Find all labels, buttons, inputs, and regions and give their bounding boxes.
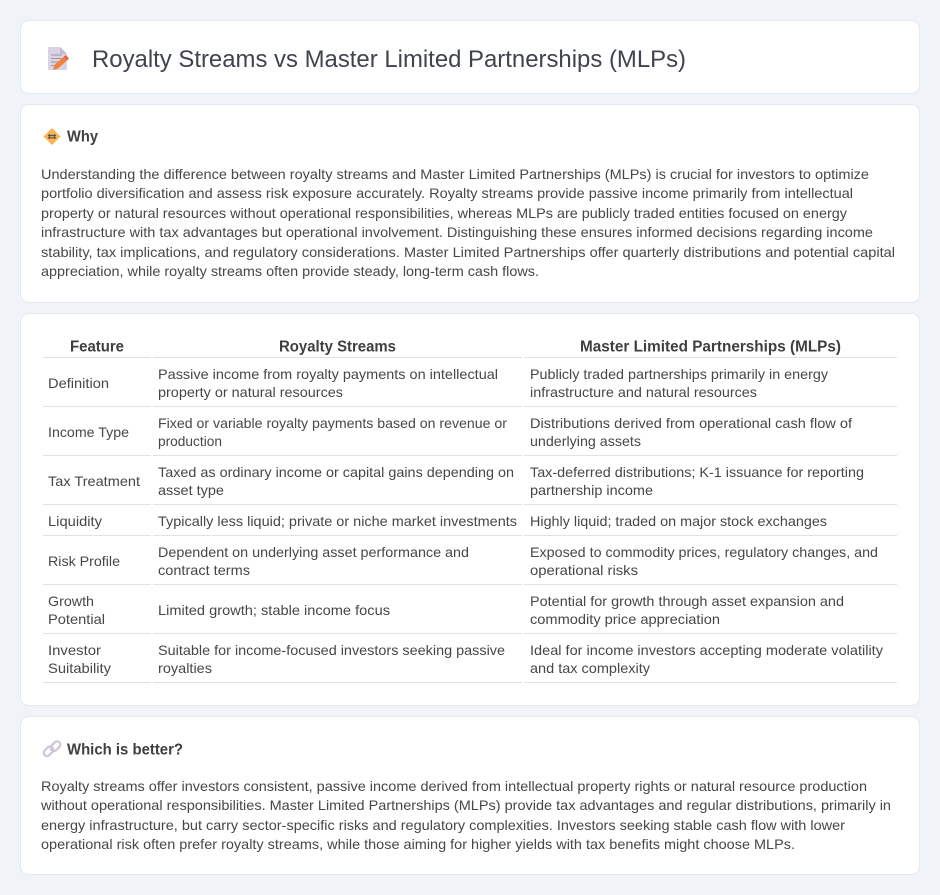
- row: risk profile: operational risks: [530, 562, 638, 578]
- why text block: property or natural resources without operational responsibilities, whereas MLPs are publicly traded entities focused on energy: [41, 205, 847, 221]
- row: risk profile: [48, 544, 878, 578]
- row: liquidity: Typically less liquid; private or niche market investments: [158, 513, 517, 529]
- table header: Master Limited Partnerships (MLPs): [580, 338, 841, 356]
- title: Royalty Streams vs Master Limited Partnerships (MLPs): [92, 46, 686, 73]
- which is better text block: without operational responsibilities. Master Limited Partnerships (MLPs) provide tax advantages and regular distributions, primarily in: [40, 797, 891, 813]
- row: tax treatment: [48, 464, 864, 498]
- why text block: portfolio diversification and assess risk exposure accurately. Royalty streams provide passive income primarily from intellectual: [41, 185, 853, 201]
- why text block: infrastructure with tax advantages but operational involvement. Distinguishing these ensures informed decisions regarding income: [41, 224, 873, 240]
- row: risk profile: contract terms: [158, 562, 250, 578]
- row: income type: underlying assets: [530, 433, 641, 449]
- row: growth potential: Potential: [48, 611, 105, 627]
- row: investor suitability: and tax complexity: [530, 660, 650, 676]
- row: liquidity: Liquidity: [48, 513, 102, 529]
- icon: document with pencil: [48, 47, 69, 70]
- row: definition: [48, 366, 828, 400]
- row: definition: property or natural resources: [158, 384, 343, 400]
- row: growth potential: Limited growth; stable income focus: [158, 602, 390, 618]
- row: investor suitability: [48, 642, 883, 676]
- row: risk profile: Exposed to commodity prices, regulatory changes, and: [530, 544, 878, 560]
- row: definition: Passive income from royalty payments on intellectual: [158, 366, 498, 382]
- icon: link: [42, 740, 62, 757]
- panel: why: [20, 104, 920, 302]
- row: income type: Income Type: [48, 424, 129, 440]
- icon: warning diamond: [44, 128, 60, 145]
- row: investor suitability: Suitable for income-focused investors seeking passive: [158, 642, 505, 658]
- row: investor suitability: Investor: [48, 642, 101, 658]
- row: liquidity: [48, 513, 827, 529]
- row: definition: Definition: [48, 375, 109, 391]
- which is better text block: Royalty streams offer investors consistent, passive income derived from intellectual property rights or natural resource production: [41, 778, 867, 794]
- heading: which is better: Which is better?: [67, 742, 183, 758]
- table header: Feature: [70, 338, 124, 356]
- why text block: [41, 166, 895, 279]
- which is better text block: [40, 778, 891, 852]
- row: definition: infrastructure and natural resources: [530, 384, 757, 400]
- header panel: [20, 20, 920, 94]
- why text block: appreciation, while royalty streams often provide steady, long-term cash flows.: [41, 263, 539, 279]
- row: investor suitability: Ideal for income investors accepting moderate volatility: [530, 642, 883, 658]
- why text block: Understanding the difference between royalty streams and Master Limited Partnerships (MLPs) is crucial for investors to optimize: [41, 166, 869, 182]
- row: growth potential: Potential for growth through asset expansion and: [530, 593, 844, 609]
- panel: which is better: [20, 716, 920, 874]
- which is better text block: energy infrastructure, but carry sector-specific risks and regulatory complexities. Investors seeking stable cash flow with lower: [41, 817, 845, 833]
- row: investor suitability: royalties: [158, 660, 212, 676]
- row: tax treatment: asset type: [158, 482, 224, 498]
- row: growth potential: Growth: [48, 593, 94, 609]
- which is better text block: operational risk often prefer royalty streams, while those aiming for higher yields with tax benefits might choose MLPs.: [41, 836, 795, 852]
- row: investor suitability: Suitability: [48, 660, 111, 676]
- row: growth potential: commodity price appreciation: [530, 611, 720, 627]
- table header: [70, 338, 841, 356]
- row: tax treatment: Tax-deferred distributions; K-1 issuance for reporting: [530, 464, 864, 480]
- row: growth potential: [48, 593, 844, 627]
- row: risk profile: Dependent on underlying asset performance and: [158, 544, 469, 560]
- row: income type: Distributions derived from operational cash flow of: [530, 415, 852, 431]
- row: income type: production: [158, 433, 222, 449]
- row: income type: Fixed or variable royalty payments based on revenue or: [158, 415, 507, 431]
- row: tax treatment: Taxed as ordinary income or capital gains depending on: [158, 464, 514, 480]
- row: income type: [48, 415, 852, 449]
- panel: comparison table: [20, 314, 920, 706]
- row: liquidity: Highly liquid; traded on major stock exchanges: [530, 513, 827, 529]
- why text block: stability, tax implications, and regulatory considerations. Master Limited Partnerships offer quarterly distributions and potential capital: [41, 244, 895, 260]
- row: tax treatment: partnership income: [530, 482, 653, 498]
- row: definition: Publicly traded partnerships primarily in energy: [530, 366, 828, 382]
- row: tax treatment: Tax Treatment: [48, 473, 140, 489]
- heading: why: Why: [67, 128, 98, 146]
- row: risk profile: Risk Profile: [48, 553, 120, 569]
- table header: Royalty Streams: [279, 338, 396, 356]
